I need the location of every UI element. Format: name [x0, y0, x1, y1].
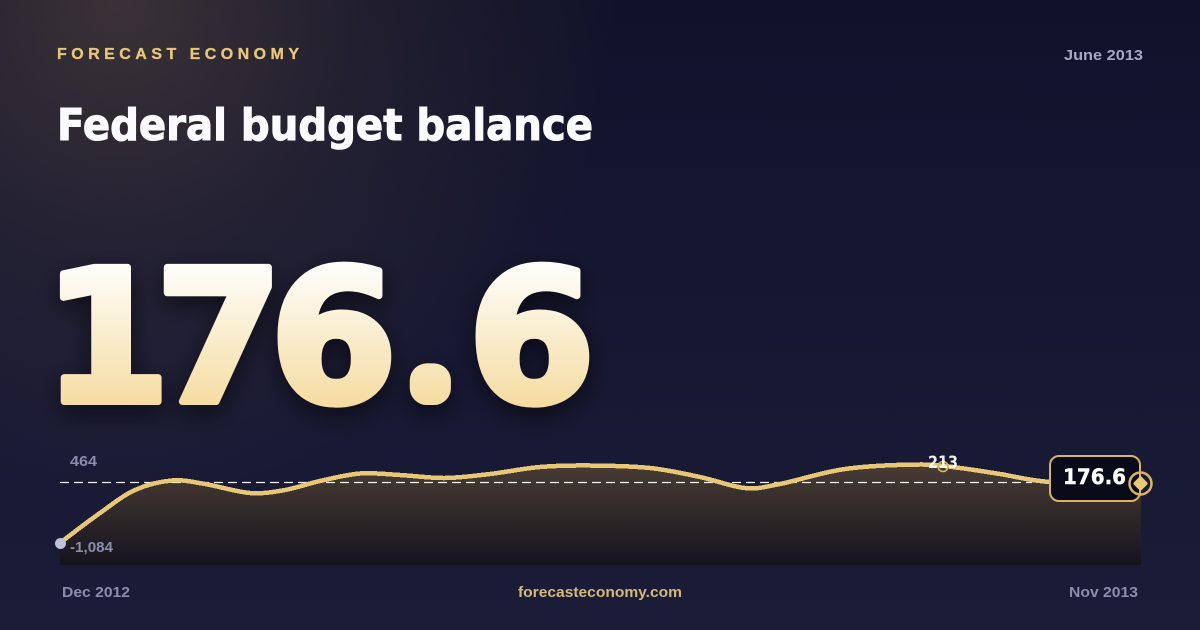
eyebrow: publisher name: FORECAST ECONOMY — [57, 46, 299, 63]
end date: Nov 2013 — [1069, 584, 1138, 601]
line series — [60, 464, 1140, 543]
title: Federal budget balance — [57, 101, 593, 151]
callout: current value: 176.6 — [1063, 465, 1126, 489]
big value: 176 — [43, 232, 398, 446]
start date: Dec 2012 — [62, 584, 130, 601]
website: forecasteconomy.com — [518, 584, 682, 601]
marker: current point — [1130, 472, 1152, 494]
axis label: min: -1,084 — [70, 540, 113, 556]
big value: 6 — [468, 232, 596, 446]
reference dashed line — [60, 482, 1032, 484]
date label: June 2013 — [1064, 47, 1143, 64]
marker: min point — [55, 538, 66, 549]
axis label: max: 464 — [70, 454, 97, 470]
area under line — [60, 464, 1141, 565]
marker: peak point with label: 213 — [928, 453, 958, 472]
callout: current value — [1050, 456, 1140, 501]
chart: area and line — [60, 464, 1141, 565]
big value: . — [423, 352, 438, 398]
